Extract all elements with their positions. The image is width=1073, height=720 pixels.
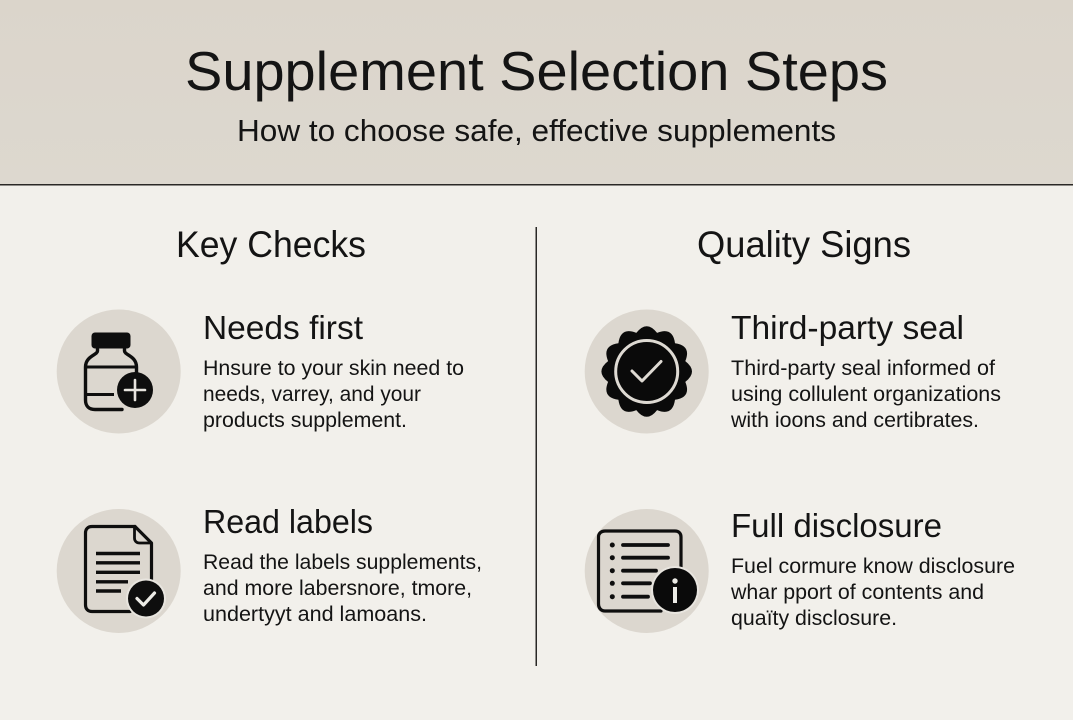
item text bbox=[730, 555, 1015, 630]
header band bbox=[0, 0, 1073, 186]
title: Supplement Selection Steps bbox=[185, 40, 888, 102]
heading: Quality Signs: Quality Signs bbox=[697, 224, 911, 265]
panel: Read labels bbox=[57, 503, 482, 633]
panel: Needs first bbox=[57, 309, 464, 434]
item heading: Full disclosure bbox=[731, 507, 942, 544]
panel: Third-party seal bbox=[585, 309, 1001, 434]
item text: and more labersnore, tmore, bbox=[203, 577, 472, 600]
icon: list document with info bbox=[585, 509, 709, 633]
icon: document with check bbox=[57, 509, 181, 633]
subtitle: How to choose safe, effective supplements bbox=[237, 113, 836, 148]
item heading: Needs first bbox=[203, 309, 363, 346]
item text: products supplement. bbox=[203, 409, 407, 432]
item text: Read the labels supplements, bbox=[203, 551, 482, 574]
item text: needs, varrey, and your bbox=[203, 383, 421, 406]
panel: Full disclosure bbox=[585, 507, 1015, 633]
item text bbox=[203, 551, 482, 626]
icon: supplement bottle with plus bbox=[57, 310, 181, 434]
item text: Fuel cormure know disclosure bbox=[731, 555, 1015, 578]
item text: quaïty disclosure. bbox=[731, 607, 897, 630]
item text: with ioons and certibrates. bbox=[730, 409, 979, 432]
item text bbox=[203, 357, 464, 432]
item heading: Read labels bbox=[203, 503, 373, 540]
item heading: Third-party seal bbox=[731, 309, 964, 346]
item text: Hnsure to your skin need to bbox=[203, 357, 464, 380]
item text: Third-party seal informed of bbox=[731, 357, 995, 380]
item text: undertyyt and lamoans. bbox=[203, 603, 427, 626]
item text: whar pport of contents and bbox=[730, 581, 984, 604]
heading: Key Checks: Key Checks bbox=[176, 224, 366, 265]
icon: seal badge with check bbox=[585, 310, 709, 434]
item text bbox=[730, 357, 1001, 432]
item text: using collulent organizations bbox=[731, 383, 1001, 406]
